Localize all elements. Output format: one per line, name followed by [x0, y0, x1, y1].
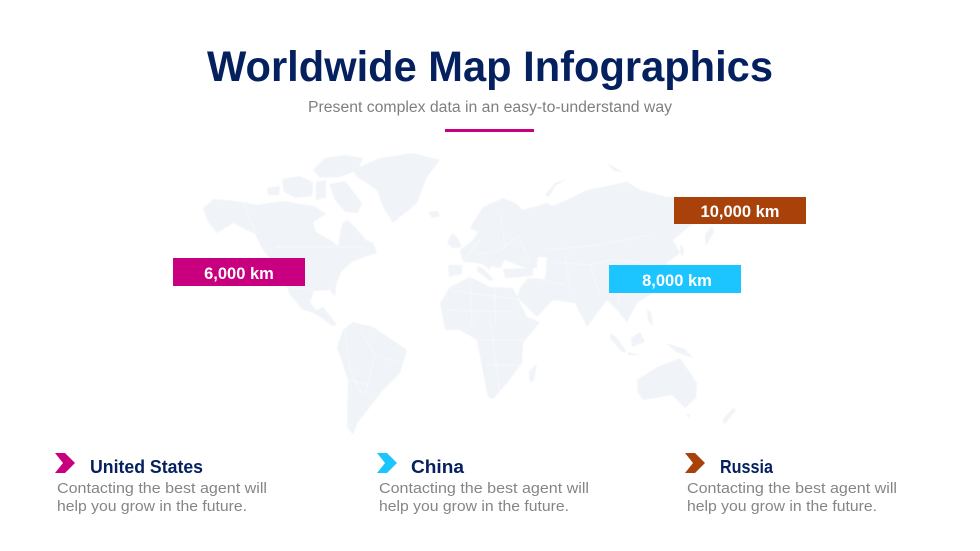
text: United States description: help you grow in the future.	[57, 498, 247, 515]
icon: cyan chevron	[377, 453, 397, 473]
block: Russia	[685, 453, 897, 515]
heading: Russia: Russia	[720, 457, 774, 477]
world map	[203, 153, 736, 435]
icon: brown chevron	[685, 453, 705, 473]
block: United States	[55, 453, 267, 515]
text: China description: Contacting the best agent will	[379, 480, 589, 497]
text: United States description: Contacting the best agent will	[57, 480, 267, 497]
icon: pink chevron	[55, 453, 75, 473]
label: 8,000 km	[609, 265, 741, 293]
heading: China: China	[411, 456, 465, 477]
title: Worldwide Map Infographics	[207, 43, 773, 91]
subtitle: Present complex data in an easy-to-understand way	[308, 99, 672, 116]
text: Russia description: help you grow in the future.	[687, 498, 877, 515]
block: China	[377, 453, 589, 515]
label: 8,000 km: 8,000 km	[642, 272, 712, 290]
text: Russia description: Contacting the best agent will	[687, 480, 897, 497]
label: 10,000 km: 10,000 km	[701, 203, 779, 221]
label: 10,000 km	[674, 197, 806, 224]
label: 6,000 km	[173, 258, 305, 286]
label: 6,000 km: 6,000 km	[204, 265, 274, 283]
title underline	[445, 129, 534, 132]
text: China description: help you grow in the future.	[379, 498, 569, 515]
heading: United States: United States	[90, 456, 203, 477]
